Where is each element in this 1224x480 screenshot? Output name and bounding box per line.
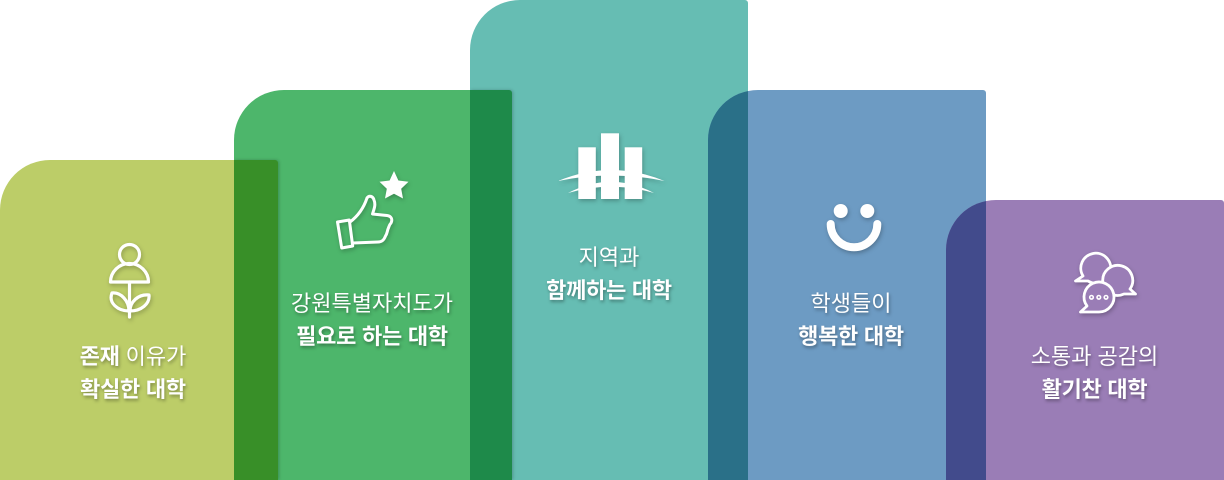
text: panel 5 label [1031, 344, 1158, 403]
icon: person with sprout [108, 242, 154, 322]
icon: buildings with arcs [559, 133, 664, 203]
overlap with third panel [708, 90, 748, 480]
text: panel 5 label: 활기찬 대학 [1042, 377, 1147, 402]
overlap with first panel [234, 160, 278, 480]
text: panel 2 label [291, 290, 454, 350]
icon: thumbs up with star [336, 171, 409, 253]
icon: speech bubbles [1074, 252, 1138, 318]
text: panel 4 label [798, 290, 906, 350]
panel: 학생들이 행복한 대학 [708, 90, 986, 480]
text: panel 4 label: 학생들이 [811, 290, 891, 316]
text: panel 1 label: 존재 이유가 [80, 344, 186, 369]
overlap with fourth panel [946, 200, 986, 480]
text: panel 4 label: 행복한 대학 [798, 324, 904, 348]
panel: 지역과 함께하는 대학 [470, 0, 748, 480]
text: panel 3 label: 함께하는 대학 [546, 278, 672, 303]
icon: smiling face [826, 204, 884, 256]
text: panel 1 label [80, 344, 188, 403]
panel: 존재 이유가 확실한 대학 [0, 160, 278, 480]
text: panel 1 label: 확실한 대학 [80, 377, 186, 402]
overlap with second panel [470, 90, 512, 480]
text: panel 3 label [546, 245, 674, 304]
text: panel 2 label: 필요로 하는 대학 [296, 324, 448, 348]
text: panel 5 label: 소통과 공감의 [1031, 344, 1158, 369]
text: panel 2 label: 강원특별자치도가 [291, 290, 453, 316]
text: panel 3 label: 지역과 [579, 245, 639, 270]
panel: 강원특별자치도가 필요로 하는 대학 [234, 90, 512, 480]
panel: 소통과 공감의 활기찬 대학 [946, 200, 1224, 480]
